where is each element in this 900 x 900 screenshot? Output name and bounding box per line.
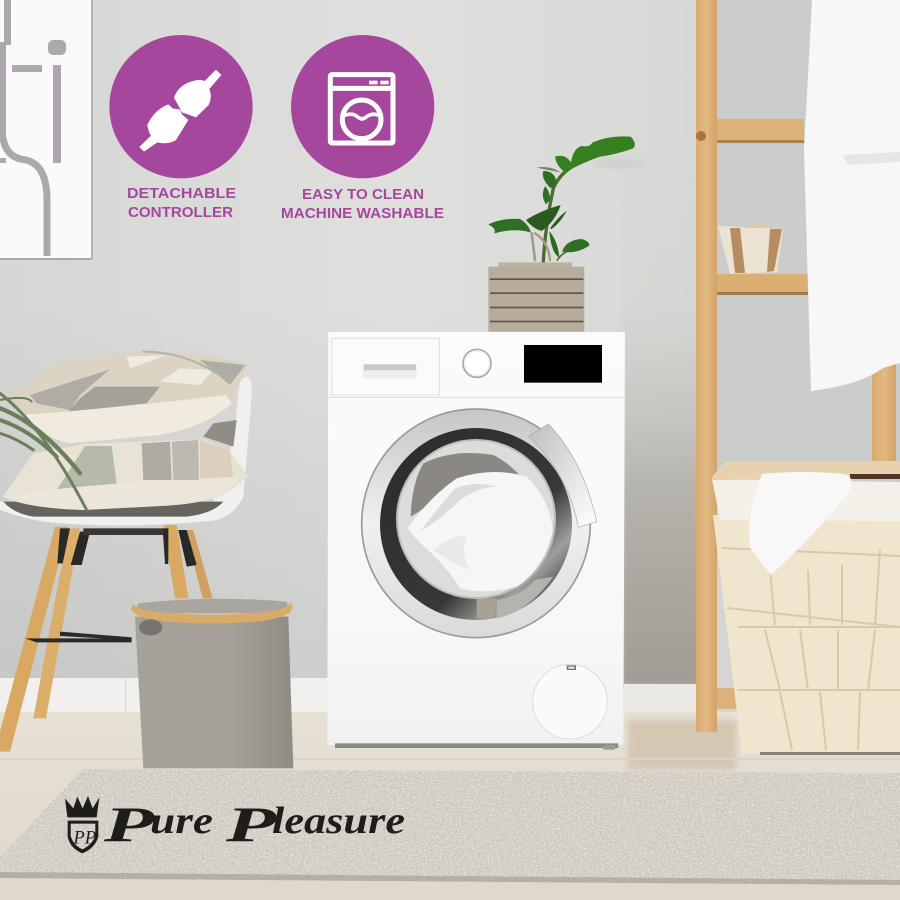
label: detachable controller: DETACHABLE (127, 186, 236, 202)
plant stems (532, 160, 587, 261)
label: easy to clean machine washable: EASY TO CLEAN (302, 187, 424, 203)
feature icon: detachable controller (109, 35, 253, 178)
label: easy to clean machine washable (281, 187, 444, 222)
icon: washer outline (330, 75, 393, 143)
small wooden bowl (718, 223, 783, 274)
icon: upper plug (174, 70, 221, 117)
rug (0, 769, 900, 885)
wall background (0, 0, 900, 715)
hanging bath towel (804, 0, 900, 391)
floor (0, 712, 900, 900)
door handle (528, 424, 597, 527)
brand logo: Pure Pleasure (65, 796, 405, 853)
laundry bag with bamboo lid (131, 599, 293, 768)
top cushion (9, 352, 248, 443)
door (362, 409, 597, 638)
wall shadow right of washer (622, 0, 700, 686)
label: easy to clean machine washable: MACHINE WASHABLE (281, 206, 444, 222)
icon: lower plug (139, 104, 188, 152)
logo wordmark: P (102, 796, 155, 852)
wicker laundry hamper (712, 461, 900, 755)
logo wordmark: leasure (272, 800, 405, 842)
filter cover (533, 664, 607, 739)
wall art print (0, 0, 93, 260)
palm fronds (0, 352, 217, 510)
logo wordmark: P (224, 796, 277, 852)
program dial (463, 349, 491, 377)
baseboard (0, 678, 696, 719)
door glass and laundry (397, 440, 555, 598)
chair legs (0, 525, 213, 752)
seat pad (3, 502, 223, 517)
black display panel (524, 345, 602, 383)
label: detachable controller: CONTROLLER (128, 205, 234, 221)
wall section behind ladder (716, 0, 900, 470)
feature icon: washing machine (291, 35, 434, 178)
chair shell (0, 377, 252, 526)
plant leaves (488, 136, 635, 258)
wooden crate (488, 267, 584, 332)
detergent drawer (332, 338, 439, 395)
bottom cushion (3, 420, 248, 510)
washing machine (327, 332, 625, 750)
potted plant on crate (488, 136, 647, 332)
logo crest: crown and shield: PP (72, 827, 96, 848)
logo crest: crown and shield (65, 796, 99, 853)
label: detachable controller (127, 186, 236, 221)
hand towel (749, 472, 852, 575)
logo wordmark: ure (150, 800, 213, 842)
chair with cushions and palm (0, 352, 252, 752)
ladder shelf (696, 0, 896, 732)
